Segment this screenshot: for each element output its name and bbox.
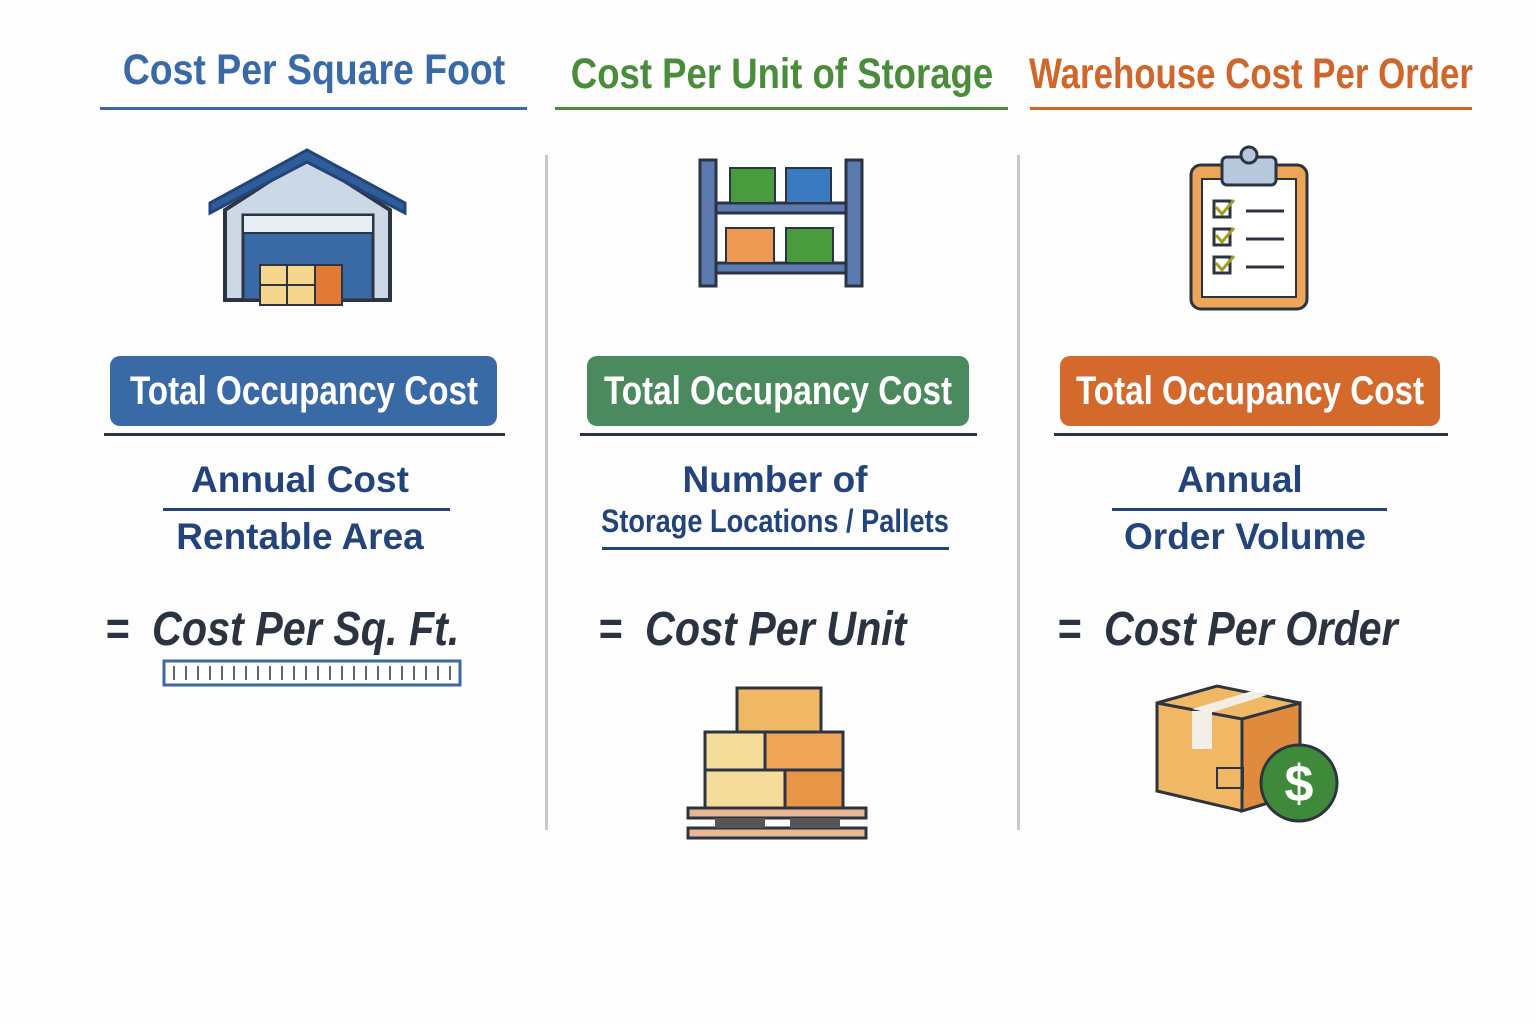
result 2: = Cost Per Unit [598,603,907,656]
text: Order Volume [1124,516,1366,557]
column 2 heading: Cost Per Unit of Storage [570,50,993,98]
icon: ruler [162,660,462,686]
button: total occupancy cost (blue): Total Occupancy Cost [129,369,478,413]
button: total occupancy cost (orange) [1060,356,1440,426]
column 3 heading: Warehouse Cost Per Order [1029,50,1473,98]
button: total occupancy cost (green) [587,356,969,426]
fraction 1: Annual Cost [191,459,409,500]
icon: box with dollar: $ [1285,755,1314,813]
icon: pallet of boxes [686,686,868,840]
icon: box with dollar [1156,684,1338,822]
button: total occupancy cost (orange): Total Occupancy Cost [1076,369,1424,413]
fraction 3: Annual [1177,459,1303,500]
column 1 heading: Cost Per Square Foot [122,46,505,94]
text: Storage Locations / Pallets [601,503,949,539]
icon: warehouse [208,148,406,306]
button: total occupancy cost (blue) [110,356,497,426]
text: Rentable Area [176,516,424,557]
icon: shelf [698,158,864,288]
result 1: = Cost Per Sq. Ft. [105,603,459,656]
icon: clipboard [1190,146,1308,310]
result 3: = Cost Per Order [1057,603,1398,656]
fraction 2: Number of [682,459,868,500]
button: total occupancy cost (green): Total Occupancy Cost [604,369,952,413]
